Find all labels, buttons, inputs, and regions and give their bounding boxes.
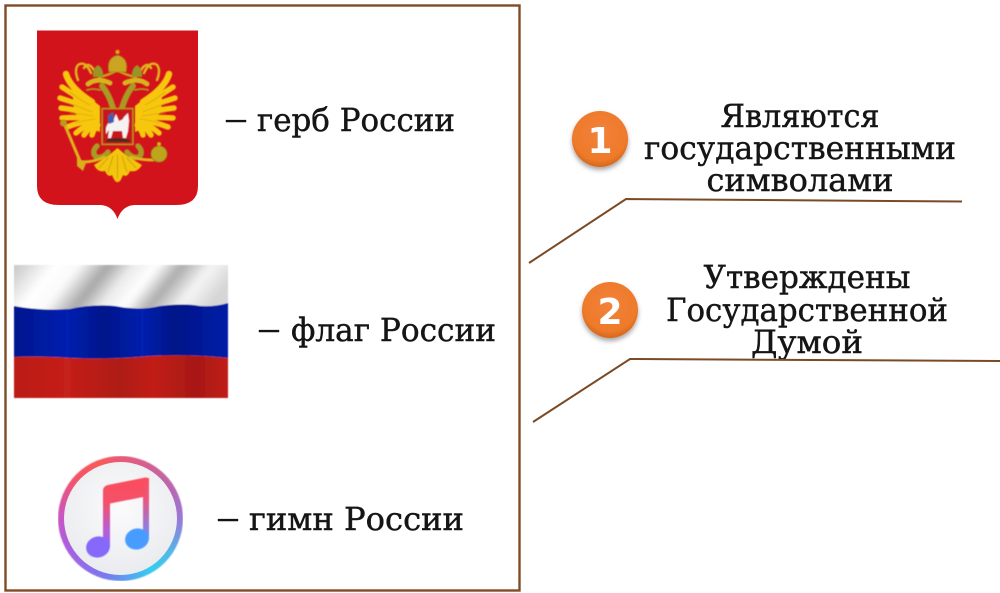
text block: fact 1 <box>644 97 956 199</box>
icon: music note (anthem) <box>58 456 183 581</box>
blue stripe <box>14 303 228 359</box>
heading: anthem label: — <box>217 501 239 536</box>
heading: flag label: флаг России <box>291 311 496 349</box>
text block: fact 1: символами <box>706 161 894 199</box>
legs <box>94 146 141 157</box>
left wing base <box>72 84 100 132</box>
badge: number 1: 1 <box>587 121 613 162</box>
icon: flag of Russia <box>13 264 229 399</box>
badge: number 1 <box>572 111 628 167</box>
heading: coat of arms label: герб России <box>257 101 455 139</box>
badge: number 2 <box>582 282 638 338</box>
heading: anthem label: гимн России <box>249 500 464 538</box>
eagle <box>60 64 175 182</box>
ribbons <box>76 64 94 80</box>
callout line 1 <box>529 199 962 263</box>
feather shading <box>68 92 167 123</box>
ring <box>58 456 183 581</box>
badge: number 2: 2 <box>597 292 623 333</box>
text block: fact 2: Государственной <box>666 291 948 329</box>
callout line 2 <box>533 359 1000 422</box>
panel: symbols frame <box>6 6 520 590</box>
text block: fact 1: Являются <box>720 97 880 135</box>
red stripe <box>14 355 228 398</box>
icon: coat of arms of Russia <box>37 30 198 219</box>
shield <box>37 30 198 219</box>
tail <box>94 148 142 182</box>
necks <box>102 86 133 108</box>
text block: fact 1: государственными <box>644 129 956 167</box>
note <box>84 477 151 560</box>
sceptre head <box>60 120 67 126</box>
white stripe <box>14 264 228 311</box>
heading: coat of arms label: — <box>225 102 247 137</box>
text block: fact 2 <box>666 258 948 361</box>
sceptre <box>64 123 80 161</box>
text block: fact 2: Думой <box>751 323 863 361</box>
heads <box>88 80 110 84</box>
crowns <box>60 50 167 171</box>
right wing base <box>135 84 163 132</box>
disc <box>64 462 177 575</box>
St George emblem <box>102 108 133 144</box>
right wing feathers <box>137 74 175 135</box>
heading: flag label: — <box>258 312 280 347</box>
text block: fact 2: Утверждены <box>704 258 910 296</box>
orb <box>151 146 167 162</box>
left wing feathers <box>60 74 98 135</box>
